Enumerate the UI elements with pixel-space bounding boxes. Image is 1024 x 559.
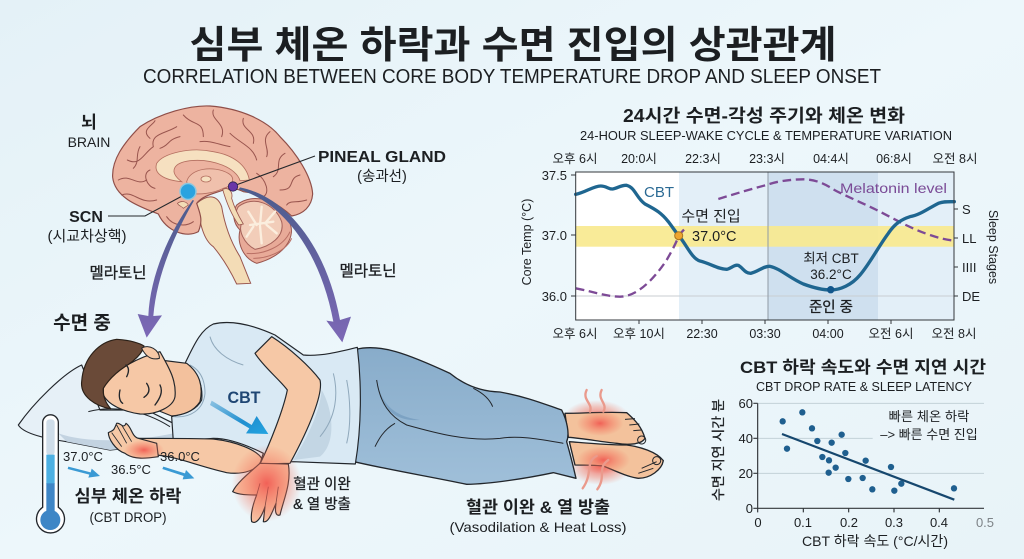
upper arm — [255, 337, 321, 464]
sleep stage labels: IIII — [962, 260, 976, 275]
lowest CBT marker — [827, 286, 834, 293]
label: sleep onset: 수면 진입 — [681, 208, 741, 225]
heat waves — [583, 390, 608, 489]
face — [103, 352, 175, 414]
sleep stage labels: S — [962, 202, 971, 217]
label: melatonin: Melatonin level — [840, 180, 947, 196]
heat glow on feet — [563, 400, 630, 437]
label: CBT: CBT — [228, 388, 261, 407]
pillow shade — [58, 433, 175, 450]
sleep onset marker — [675, 232, 683, 240]
sleep stage labels — [962, 202, 980, 304]
temperature axis labels: 36.0 — [542, 289, 567, 304]
panel: 24-hour chart — [520, 106, 1000, 341]
label: vasodilation feet: 혈관 이완 & 열 방출 — [466, 498, 610, 517]
arrow: melatonin right — [239, 187, 351, 342]
upper foot — [565, 412, 645, 444]
front hand — [108, 423, 158, 458]
label: brain: 뇌 — [81, 113, 97, 132]
bottom time axis — [553, 327, 976, 341]
face features — [119, 365, 161, 405]
ear — [142, 347, 159, 359]
temperature 36.5: 36.5°C — [111, 462, 151, 477]
annotation: –> 빠른 수면 진입 — [880, 427, 978, 442]
top time axis: 22:3시 — [685, 152, 721, 166]
melatonin curve — [576, 179, 954, 297]
label: SCN korean: (시교차상핵) — [48, 228, 126, 245]
x axis title: CBT 하락 속도 (°C/시간) — [802, 533, 948, 549]
label: CBT drop english: (CBT DROP) — [90, 509, 166, 525]
heat glow wrist — [232, 445, 302, 522]
bottom time axis: 오후 10시 — [613, 327, 665, 341]
trouser shading — [377, 380, 420, 420]
neck — [157, 360, 201, 416]
bottom time axis: 오전 6시 — [869, 327, 913, 341]
annotation — [880, 409, 978, 442]
bottom time axis: 22:30 — [686, 327, 718, 341]
panel: scatter chart — [711, 358, 994, 549]
icon: thermometer — [36, 415, 64, 533]
legs and feet — [354, 348, 663, 489]
brain stem — [197, 197, 251, 284]
shirt folds — [173, 337, 350, 443]
threshold band — [576, 226, 954, 247]
label: CBT drop: 심부 체온 하락 — [74, 487, 182, 506]
temperature axis labels — [542, 168, 567, 304]
arrow: CBT — [210, 401, 268, 434]
heat glow forearm — [124, 440, 164, 460]
cerebellum — [234, 199, 292, 263]
scatter points — [779, 409, 957, 494]
lower hand — [233, 463, 289, 522]
bottom time axis: 03:30 — [749, 327, 781, 341]
shirt shading — [293, 390, 331, 460]
scatter subtitle: CBT DROP RATE & SLEEP LATENCY — [756, 380, 973, 394]
label: pineal korean: (송과선) — [357, 168, 407, 185]
bottom time axis: 오전 8시 — [932, 327, 976, 341]
sleep stage labels: LL — [962, 231, 976, 246]
label: brain english: BRAIN — [68, 134, 110, 150]
sleep shading — [679, 172, 954, 320]
icon: SCN marker — [180, 184, 196, 200]
top time axis: 20:0시 — [621, 152, 657, 166]
temperature drop sequence — [63, 449, 200, 525]
x axis labels — [754, 515, 994, 530]
pillow — [18, 365, 175, 450]
y axis labels: 20 — [739, 466, 753, 481]
icon: pineal marker — [228, 182, 238, 191]
temperature 37.0: 37.0°C — [63, 449, 103, 464]
temperature axis labels: 37.5 — [542, 168, 567, 183]
scatter title: CBT 하락 속도와 수면 지연 시간 — [740, 358, 986, 377]
thalamus — [187, 169, 233, 194]
y axis title: 수면 지연 시간 분 — [711, 399, 726, 501]
top time axis: 04:4시 — [813, 152, 849, 166]
label: CBT: CBT — [644, 184, 674, 201]
label: melatonin left: 멜라토닌 — [89, 264, 147, 282]
arrow: melatonin left — [138, 200, 194, 338]
small arrows — [68, 467, 194, 479]
y axis labels — [739, 396, 753, 516]
pineal stalk — [223, 189, 243, 225]
label: during sleep: 수면 중 — [53, 312, 111, 334]
hair — [82, 339, 144, 409]
cerebrum — [113, 106, 313, 234]
temperature axis labels: 37.0 — [542, 228, 567, 243]
top time axis: 23:3시 — [749, 152, 785, 166]
chart title: 24시간 수면-각성 주기와 체온 변화 — [623, 106, 905, 126]
top time axis: 오후 6시 — [553, 152, 597, 166]
label: lowest value: 36.2°C — [810, 267, 852, 282]
label: vasodilation arm: & 열 방출 — [293, 496, 351, 513]
deep sleep shading — [768, 172, 878, 320]
label: onset temperature: 37.0°C — [692, 229, 736, 245]
bottom time axis: 04:00 — [812, 327, 844, 341]
sleep stage labels: DE — [962, 289, 980, 304]
panel: brain diagram — [48, 106, 446, 342]
grid and axes — [753, 403, 984, 512]
leader lines — [108, 156, 315, 216]
label: SCN: SCN — [69, 209, 103, 226]
trouser folds — [375, 380, 563, 447]
x axis labels: 0.4 — [930, 515, 948, 530]
optic chiasm — [177, 202, 188, 208]
x axis labels: 0.3 — [885, 515, 903, 530]
top time axis: 06:8시 — [876, 152, 912, 166]
CBT curve — [576, 185, 954, 290]
annotation: 빠른 체온 하락 — [889, 409, 969, 424]
lower foot — [569, 442, 663, 478]
label: vasodilation feet: (Vasodilation & Heat Loss) — [450, 519, 626, 535]
hair and head — [82, 339, 201, 416]
label: stage: 준인 중 — [809, 299, 853, 316]
temperature 36.0: 36.0°C — [160, 449, 200, 464]
forearm — [127, 438, 262, 473]
x axis labels: 0.1 — [794, 515, 812, 530]
x axis labels: 0 — [754, 515, 762, 530]
plot frame — [571, 172, 958, 324]
label: vasodilation arm: 혈관 이완 — [293, 476, 351, 493]
y axis labels: 40 — [739, 431, 753, 446]
trend line — [782, 434, 954, 500]
chart subtitle: 24-HOUR SLEEP-WAKE CYCLE & TEMPERATURE VARIATION — [580, 128, 952, 143]
subtitle: CORRELATION BETWEEN CORE BODY TEMPERATURE DROP AND SLEEP ONSET — [143, 66, 881, 88]
label: vasodilation arm — [293, 476, 351, 513]
label: pineal gland: PINEAL GLAND — [318, 149, 446, 166]
label: melatonin right: 멜라토닌 — [339, 262, 397, 280]
top time axis — [553, 152, 977, 166]
bottom time axis: 오후 6시 — [553, 327, 597, 341]
x axis labels: 0.5 — [976, 515, 994, 530]
brain illustration — [113, 106, 313, 284]
torso and shirt — [172, 323, 360, 464]
label: vasodilation feet — [450, 498, 626, 535]
label: lowest CBT: 최저 CBT — [803, 251, 859, 266]
y axis labels: 60 — [739, 396, 753, 411]
trousers — [354, 348, 576, 484]
panel: sleeping figure — [18, 323, 663, 522]
corpus callosum — [156, 150, 249, 182]
toes — [625, 419, 661, 473]
glow overlays — [577, 411, 623, 436]
top time axis: 오전 8시 — [933, 152, 977, 166]
y axis labels: 0 — [746, 501, 753, 516]
temperature axis title: Core Temp (°C) — [520, 199, 534, 285]
sleep stage title: Sleep Stages — [986, 210, 1000, 284]
gyri lines — [118, 110, 307, 225]
title: 심부 체온 하락과 수면 진입의 상관관계 — [190, 25, 836, 67]
plot background — [576, 172, 954, 320]
x axis labels: 0.2 — [840, 515, 858, 530]
